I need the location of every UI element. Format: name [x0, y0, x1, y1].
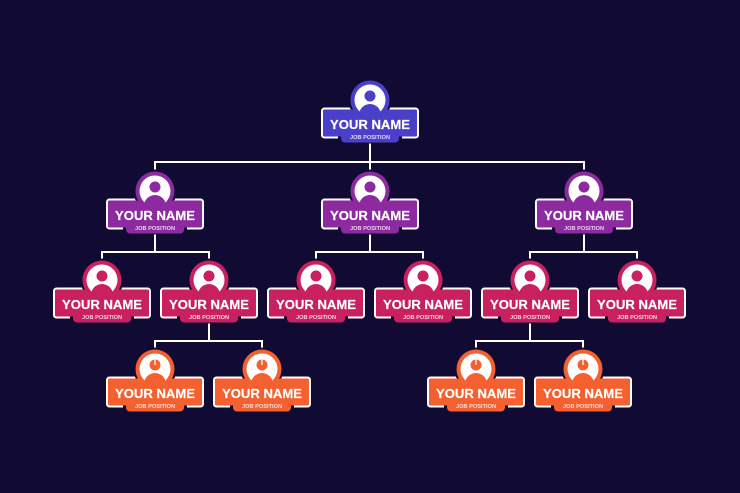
node: second level centre: JOB POSITION	[350, 226, 390, 232]
node: third level 3: YOUR NAME	[276, 297, 356, 312]
node: third level 2: YOUR NAME	[169, 297, 249, 312]
node: second level right: YOUR NAME	[544, 208, 624, 223]
node: fourth level 1	[107, 348, 203, 412]
node: second level left: JOB POSITION	[135, 226, 175, 232]
node: top level: JOB POSITION	[350, 135, 390, 141]
node: third level 6: YOUR NAME	[597, 297, 677, 312]
node: third level 5: YOUR NAME	[490, 297, 570, 312]
node: fourth level 2	[214, 348, 310, 412]
node: fourth level 3	[428, 348, 524, 412]
node: third level 5: JOB POSITION	[510, 315, 550, 321]
node: third level 4: JOB POSITION	[403, 315, 443, 321]
node: third level 4: YOUR NAME	[383, 297, 463, 312]
node: third level 6	[589, 258, 685, 324]
node: fourth level 1: YOUR NAME	[115, 386, 195, 401]
node: third level 2: JOB POSITION	[189, 315, 229, 321]
node: fourth level 2: JOB POSITION	[242, 404, 282, 410]
node: fourth level 1: JOB POSITION	[135, 404, 175, 410]
node: second level left	[107, 170, 203, 234]
node: fourth level 4: YOUR NAME	[543, 386, 623, 401]
node: third level 3	[268, 258, 364, 324]
connector lines	[102, 140, 637, 351]
node: top level: YOUR NAME	[330, 117, 410, 132]
node: fourth level 4	[535, 348, 631, 412]
node: fourth level 3: JOB POSITION	[456, 404, 496, 410]
node: third level 5	[482, 258, 578, 324]
node: second level centre: YOUR NAME	[330, 208, 410, 223]
node: second level right	[536, 170, 632, 234]
node: third level 1	[54, 258, 150, 324]
node: third level 6: JOB POSITION	[617, 315, 657, 321]
node: second level left: YOUR NAME	[115, 208, 195, 223]
node: fourth level 3: YOUR NAME	[436, 386, 516, 401]
node: fourth level 4: JOB POSITION	[563, 404, 603, 410]
node: third level 4	[375, 258, 471, 324]
node: third level 1: JOB POSITION	[82, 315, 122, 321]
node: fourth level 2: YOUR NAME	[222, 386, 302, 401]
node: third level 2	[161, 258, 257, 324]
node: second level centre	[322, 170, 418, 234]
node: third level 3: JOB POSITION	[296, 315, 336, 321]
node: top level	[322, 78, 418, 144]
node: third level 1: YOUR NAME	[62, 297, 142, 312]
node: second level right: JOB POSITION	[564, 226, 604, 232]
